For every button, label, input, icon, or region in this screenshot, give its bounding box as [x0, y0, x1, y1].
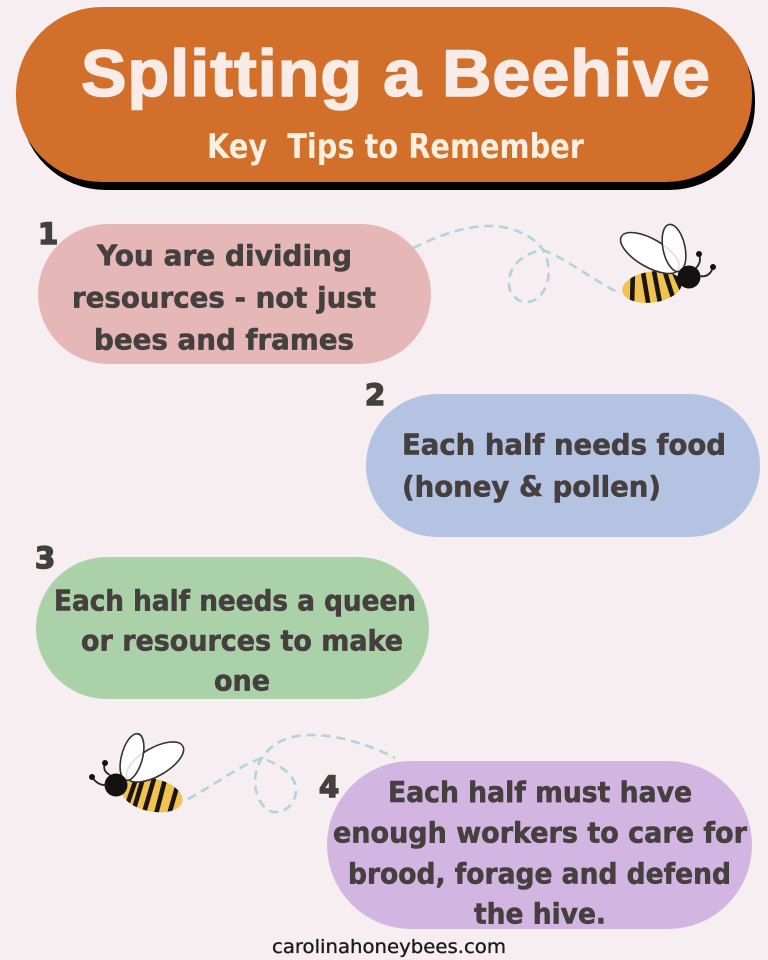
tip 1 text: bees and frames	[94, 324, 354, 356]
number 2: 2	[365, 378, 385, 412]
tip 2 text: (honey & pollen)	[402, 470, 661, 504]
tip 1 text: resources - not just	[72, 282, 376, 314]
tip 1 text: You are dividing	[96, 240, 352, 272]
tip 4 text: enough workers to care for	[333, 816, 747, 850]
dashed flight path 2	[188, 735, 395, 812]
panel: tip 4	[327, 761, 752, 930]
tip 2 text: Each half needs food	[402, 428, 726, 462]
tip 4 text: Each half must have	[388, 776, 692, 809]
footer url: carolinahoneybees.com	[272, 936, 506, 958]
subtitle: Key Tips to Remember	[207, 127, 584, 167]
title banner	[16, 7, 755, 190]
icon: bee 2	[89, 732, 184, 812]
panel: tip 1	[38, 217, 431, 364]
number 1: 1	[38, 217, 58, 251]
panel: tip 3	[35, 541, 429, 699]
tip 3 text: one	[214, 664, 270, 698]
tip 4 text: the hive.	[474, 898, 606, 930]
tip 3 text: Each half needs a queen	[54, 584, 416, 618]
panel: tip 2	[365, 378, 760, 537]
icon: bee 1	[620, 224, 716, 303]
dashed flight path 1	[413, 226, 617, 302]
number 4: 4	[319, 770, 339, 804]
tip 3 text: or resources to make	[81, 624, 403, 658]
title: Splitting a Beehive	[81, 36, 711, 110]
number 3: 3	[35, 541, 55, 575]
tip 4 text: brood, forage and defend	[348, 858, 731, 890]
